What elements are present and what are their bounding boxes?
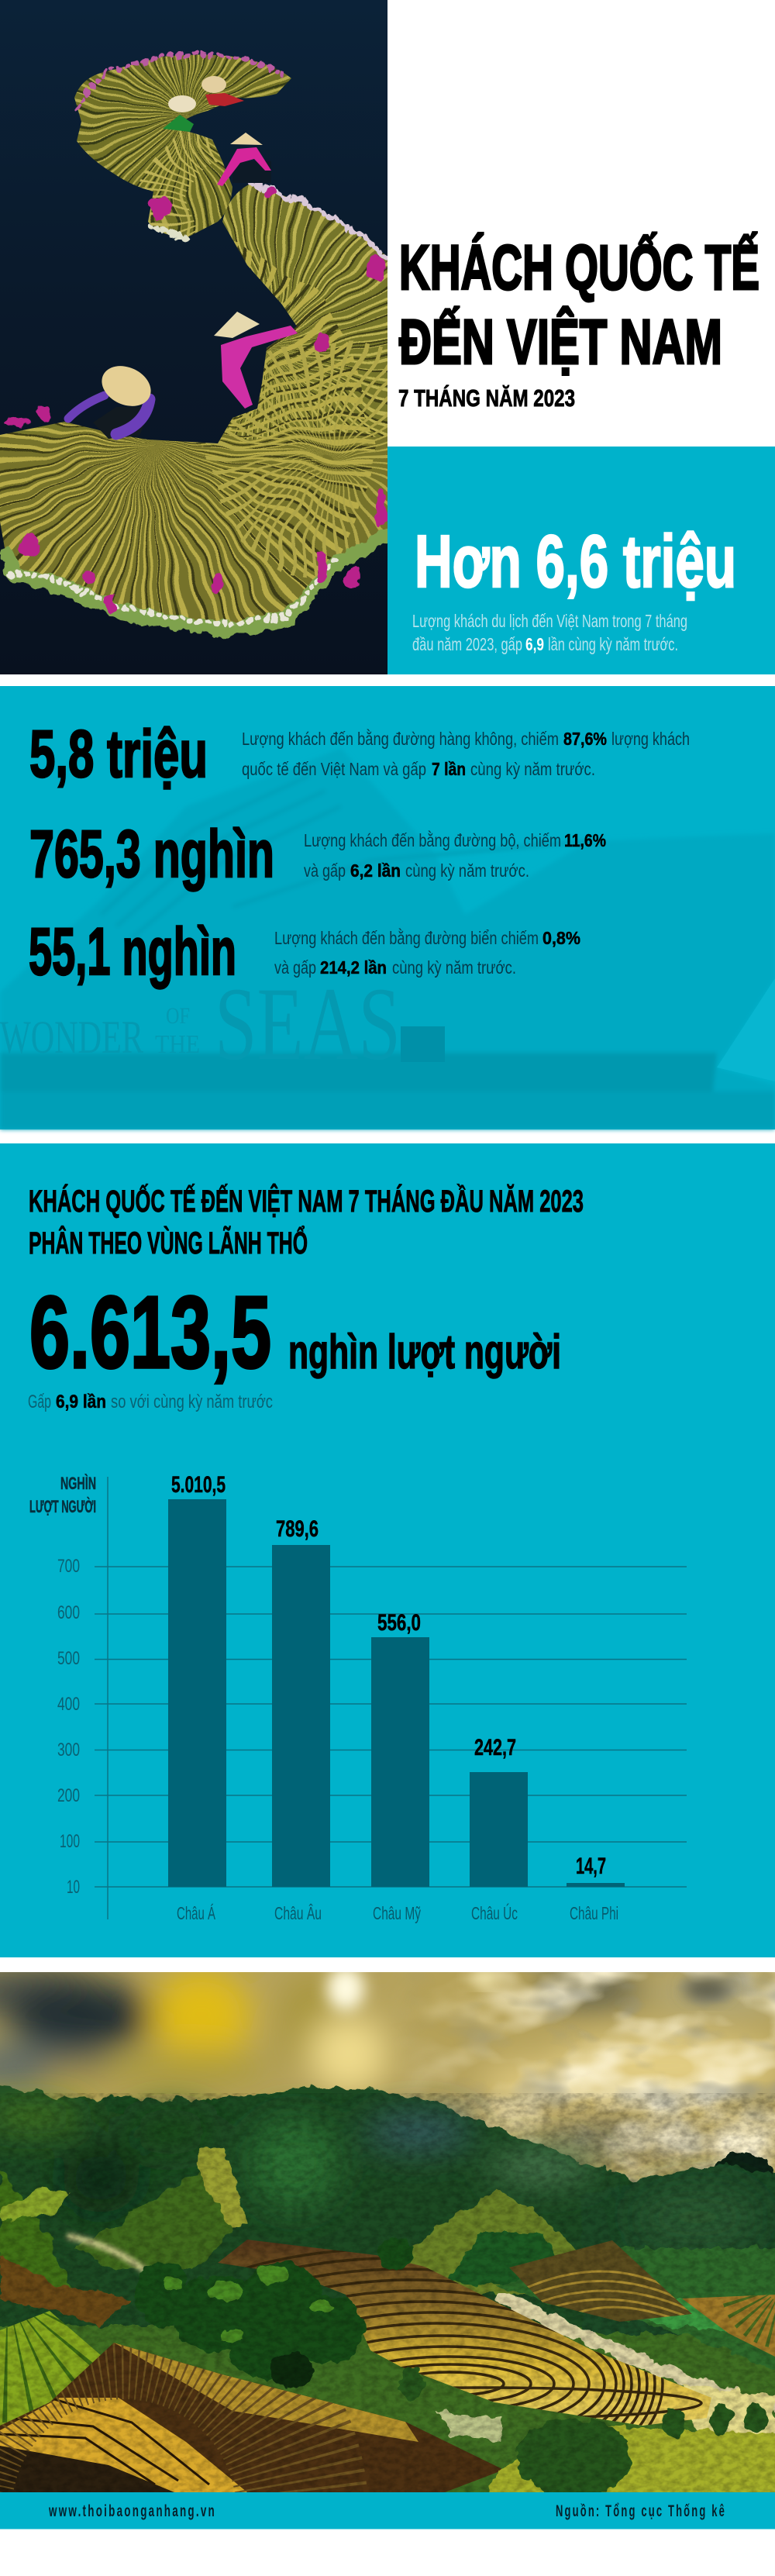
y axis labels: 500 (57, 1648, 80, 1669)
foreground green bushes right (398, 2368, 775, 2500)
stat: air (29, 717, 690, 791)
stat: air: Lượng khách đến bằng đường hàng không, chiếm (242, 729, 559, 749)
stat: road: Lượng khách đến bằng đường bộ, chiếm (304, 830, 561, 850)
stat: air: 5,8 triệu (29, 717, 208, 791)
description: 6,9 (525, 634, 544, 654)
y axis labels: 200 (57, 1785, 80, 1806)
cruise ship watermark: THE (155, 1030, 200, 1059)
category labels: Châu Á (177, 1903, 215, 1923)
right-hand terraces (496, 2248, 775, 2372)
y axis labels (57, 1556, 80, 1898)
bar values: 789,6 (276, 1516, 319, 1542)
stat: sea: 55,1 nghìn (29, 915, 236, 989)
description: lần cùng kỳ năm trước. (548, 634, 678, 654)
bar values: 242,7 (474, 1735, 516, 1760)
film grain (0, 2093, 775, 2492)
flowers along the edge of the fans (8, 54, 388, 629)
foreground brown and gold terraces (0, 2343, 502, 2492)
bars (168, 1499, 625, 1887)
woman in pink with conical hat (217, 133, 271, 186)
y axis labels: 600 (57, 1602, 80, 1623)
stat: sea (29, 915, 580, 989)
central rice terraces (218, 2240, 711, 2426)
y axis labels: 300 (57, 1740, 80, 1760)
sky (0, 1972, 775, 2183)
stat: sea: Lượng khách đến bằng đường biển chiếm (274, 928, 539, 948)
stat: road (29, 817, 606, 891)
description: đầu năm 2023, gấp (412, 634, 522, 654)
total figure: 6.613,5 (29, 1275, 271, 1389)
total figure (29, 1275, 561, 1389)
stat: road: 11,6% (564, 830, 606, 850)
website: www.thoibaonganhang.vn (48, 2502, 216, 2520)
bar values: 14,7 (576, 1854, 606, 1879)
panel: total visitors (388, 447, 775, 674)
woman in violet with conical hat (68, 358, 157, 439)
category labels: Châu Mỹ (373, 1903, 421, 1923)
comparison note: 6,9 lần (56, 1391, 106, 1412)
y axis labels: 100 (60, 1831, 80, 1852)
stat: sea: và gấp (274, 957, 316, 978)
stat: sea: 214,2 lần (320, 957, 387, 978)
category labels: Châu Úc (471, 1903, 518, 1923)
stat: road: 6,2 lần (350, 860, 401, 881)
total figure: nghìn lượt người (288, 1326, 561, 1379)
woman in red with conical hat (202, 76, 244, 106)
title block: 7 THÁNG NĂM 2023 (398, 385, 575, 412)
stat: sea: 0,8% (542, 928, 580, 948)
heading: PHÂN THEO VÙNG LÃNH THỔ (29, 1224, 308, 1260)
y axis title: NGHÌN (60, 1474, 96, 1493)
stat: air: quốc tế đến Việt Nam và gấp (242, 759, 426, 779)
stat: air: 7 lần (432, 759, 466, 779)
sunlit slopes (0, 2147, 597, 2295)
category labels: Châu Âu (274, 1903, 322, 1923)
stat: road: 765,3 nghìn (29, 817, 274, 891)
comparison note: so với cùng kỳ năm trước (111, 1391, 273, 1412)
cruise ship watermark: SEAS (215, 967, 401, 1082)
foreground green paddy left (0, 2311, 101, 2426)
footer band (0, 2492, 775, 2529)
comparison note (28, 1391, 273, 1412)
stat: road: và gấp (304, 860, 346, 881)
category labels (177, 1903, 618, 1923)
y axis labels: 10 (67, 1877, 80, 1898)
y axis title: LƯỢT NGƯỜI (29, 1497, 96, 1516)
photo: women harvesting water lilies (0, 0, 411, 674)
description (412, 611, 687, 654)
stat: air: lượng khách (611, 729, 690, 749)
heading (29, 1183, 584, 1260)
woman in green with conical hat (163, 95, 196, 132)
lily stem fan: upper (74, 54, 291, 237)
cruise ship watermark: OF (166, 1003, 190, 1029)
category labels: Châu Phi (570, 1903, 618, 1923)
bar chart (29, 1472, 687, 1923)
lily stem fan: large lower S (0, 184, 388, 623)
mountain range (0, 2087, 775, 2333)
left terraces and paths (0, 2256, 132, 2326)
stat: road: cùng kỳ năm trước. (405, 860, 529, 881)
bar values (171, 1472, 606, 1879)
cruise ship watermark (0, 748, 775, 1129)
woman in magenta with conical hat (214, 312, 298, 409)
stat: sea: cùng kỳ năm trước. (392, 957, 516, 978)
y axis labels: 400 (57, 1694, 80, 1715)
comparison note: Gấp (28, 1391, 51, 1412)
stat: air: 87,6% (563, 729, 607, 749)
bar values: 556,0 (377, 1610, 421, 1636)
stat: air: cùng kỳ năm trước. (470, 759, 595, 779)
photo: rice terraces and mountains (0, 1972, 775, 2492)
panel: arrivals by transport mode (0, 686, 775, 1129)
tree clusters (136, 2237, 412, 2388)
cloud texture (403, 1972, 775, 2183)
cruise ship watermark: WONDER (0, 1012, 143, 1063)
bar values: 5.010,5 (171, 1472, 226, 1498)
title block (398, 233, 760, 412)
y axis labels: 700 (57, 1556, 80, 1577)
panel: arrivals by region (0, 1143, 775, 1957)
y axis title (29, 1474, 96, 1516)
